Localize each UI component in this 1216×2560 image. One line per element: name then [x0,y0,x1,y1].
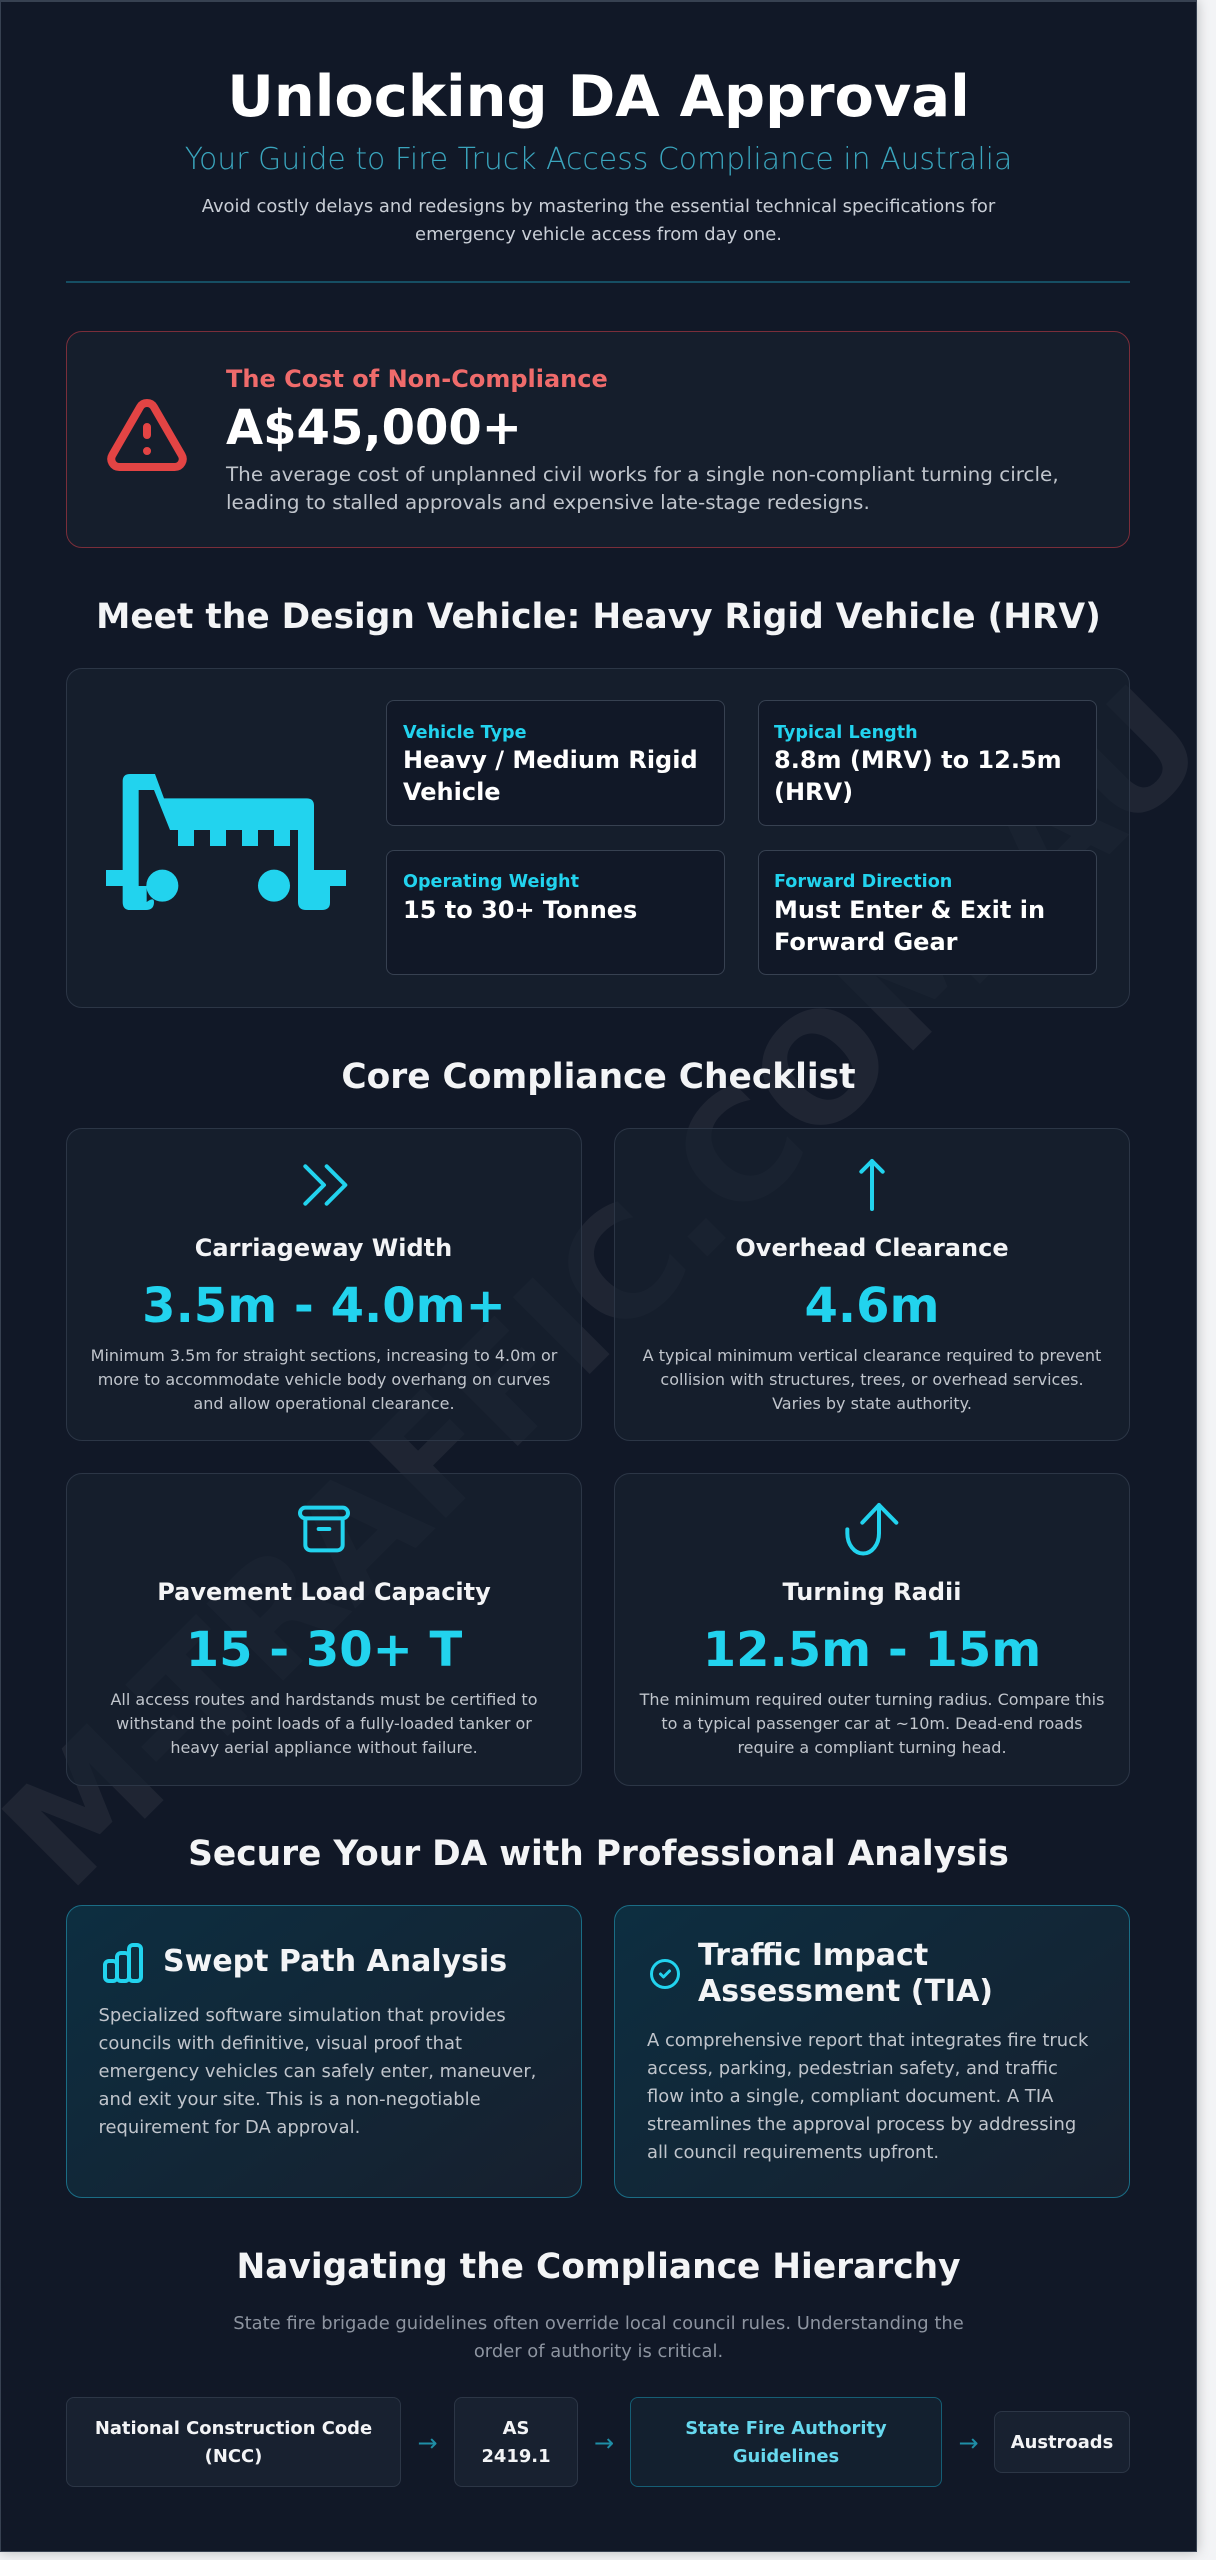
carriageway description: Minimum 3.5m for straight sections, increasing to 4.0m or [91,1346,557,1365]
step text: AS 2419.1: AS [503,2418,529,2438]
cost figure: A$45,000+ [226,400,522,456]
heading: checklist: Core Compliance Checklist [341,1057,856,1097]
icon: turning arrow [845,1502,898,1556]
cost description: leading to stalled approvals and expensive late-stage redesigns. [226,490,870,514]
TIA description: streamlines the approval process by addressing [647,2114,1076,2135]
intro text: emergency vehicle access from day one. [415,224,782,245]
value: forward direction [774,896,1045,956]
step text: state fire authority: Guidelines [733,2446,839,2466]
overhead heading: Overhead Clearance [735,1234,1009,1262]
turning description: require a compliant turning head. [737,1738,1007,1757]
value: forward direction: Must Enter & Exit in [774,896,1045,924]
swept path description: and exit your site. This is a non-negotiable [98,2089,481,2110]
carriageway description [91,1346,558,1413]
TIA description: access, parking, pedestrian safety, and traffic [647,2058,1058,2079]
step: state fire authority [630,2397,942,2487]
step text: AS 2419.1: 2419.1 [481,2446,551,2466]
carriageway description: more to accommodate vehicle body overhang on curves [98,1370,550,1389]
step: Austroads [994,2411,1130,2473]
swept path description: emergency vehicles can safely enter, maneuver, [98,2061,536,2082]
value: forward direction: Forward Gear [774,928,958,956]
TIA description [647,2030,1088,2163]
icon: up arrow [859,1158,885,1211]
card: operating weight [386,850,725,975]
carriageway heading: Carriageway Width [195,1234,452,1262]
icon: warning triangle [107,399,187,471]
overhead description: collision with structures, trees, or overhead services. [660,1370,1084,1389]
value: operating weight: 15 to 30+ Tonnes [403,896,637,924]
cost description: The average cost of unplanned civil works for a single non-compliant turning circle, [226,462,1059,486]
hierarchy intro [233,2312,964,2362]
step text: NCC: National Construction Code [95,2418,372,2438]
step: national construction code [66,2397,401,2487]
panel: pavement load [66,1473,582,1786]
swept path description: Specialized software simulation that provides [98,2005,506,2026]
value: typical length: (HRV) [774,778,853,806]
step text: state fire authority: State Fire Authority [685,2418,887,2438]
card: vehicle type [386,700,725,826]
TIA description: flow into a single, compliant document. A TIA [647,2086,1053,2107]
TIA description: A comprehensive report that integrates fire truck [647,2030,1088,2051]
panel: turning radii [614,1473,1130,1786]
swept path description [98,2005,536,2138]
title: Unlocking DA Approval [227,63,970,130]
overhead description: A typical minimum vertical clearance required to prevent [643,1346,1101,1365]
panel: design vehicle [66,668,1130,1008]
value: vehicle type [403,746,698,806]
intro text: Avoid costly delays and redesigns by mastering the essential technical specifications for [202,196,995,217]
step text: Austroads: Austroads [1011,2432,1113,2452]
TIA heading: Traffic Impact [698,1938,928,1972]
subtitle: Your Guide to Fire Truck Access Compliance in Australia [185,142,1012,177]
arrow: state to Austroads: → [958,2429,979,2457]
carriageway description: and allow operational clearance. [193,1394,455,1413]
cost description [226,462,1059,514]
turning description: to a typical passenger car at ~10m. Dead-end roads [661,1714,1083,1733]
arrow: NCC to AS: → [417,2429,438,2457]
card: typical length [758,700,1097,826]
swept path heading: Swept Path Analysis [163,1944,507,1979]
pavement description: heavy aerial appliance without failure. [170,1738,478,1757]
heading: professional analysis: Secure Your DA with Professional Analysis [188,1834,1009,1874]
value: typical length [774,746,1062,806]
turning description: The minimum required outer turning radius. Compare this [640,1690,1104,1709]
icon: double chevron [303,1164,348,1206]
heading: compliance hierarchy: Navigating the Compliance Hierarchy [236,2247,961,2287]
panel: overhead clearance [614,1128,1130,1441]
step: AS 2419.1 [454,2397,578,2487]
TIA heading [698,1938,993,2008]
arrow: AS to state: → [594,2429,614,2457]
label: typical length: Typical Length [774,722,918,742]
icon: check circle [650,1959,680,1989]
step text: NCC [95,2418,372,2466]
carriageway value: 3.5m - 4.0m+ [142,1278,506,1334]
icon: bar chart [103,1943,143,1983]
icon: archive box [298,1506,350,1552]
intro text [202,196,996,245]
overhead value: 4.6m [804,1278,940,1334]
card: forward direction [758,850,1097,975]
icon: fire truck [106,774,346,910]
turning heading: Turning Radii [783,1578,961,1606]
hierarchy intro: order of authority is critical. [474,2340,723,2362]
panel: swept path analysis [66,1905,582,2198]
step text: AS 2419.1 [481,2418,551,2466]
overhead description [642,1346,1101,1413]
TIA description: all council requirements upfront. [647,2142,939,2163]
swept path description: requirement for DA approval. [98,2117,360,2138]
swept path description: councils with definitive, visual proof that [98,2033,462,2054]
label: forward direction: Forward Direction [774,872,952,892]
value: vehicle type: Heavy / Medium Rigid [403,746,698,774]
panel: cost of non-compliance [66,331,1130,548]
step text: NCC: (NCC) [205,2446,262,2466]
heading: design vehicle: Meet the Design Vehicle: Heavy Rigid Vehicle (HRV) [96,596,1101,636]
pavement description [110,1690,538,1757]
value: vehicle type: Vehicle [403,778,501,806]
pavement description: All access routes and hardstands must be certified to [110,1690,538,1709]
cost heading: The Cost of Non-Compliance [226,365,608,393]
overhead description: Varies by state authority. [772,1394,972,1413]
TIA heading: Assessment (TIA) [698,1974,993,2008]
pavement value: 15 - 30+ T [186,1622,462,1678]
value: typical length: 8.8m (MRV) to 12.5m [774,746,1062,774]
panel: traffic impact assessment [614,1905,1130,2198]
panel: carriageway width [66,1128,582,1441]
label: vehicle type: Vehicle Type [403,722,527,742]
turning description [640,1690,1104,1757]
hierarchy intro: State fire brigade guidelines often override local council rules. Understanding the [233,2312,964,2334]
pavement description: withstand the point loads of a fully-loaded tanker or [116,1714,532,1733]
label: operating weight: Operating Weight [403,872,579,892]
turning value: 12.5m - 15m [703,1622,1041,1678]
step text: state fire authority [685,2418,887,2466]
pavement heading: Pavement Load Capacity [157,1578,491,1606]
